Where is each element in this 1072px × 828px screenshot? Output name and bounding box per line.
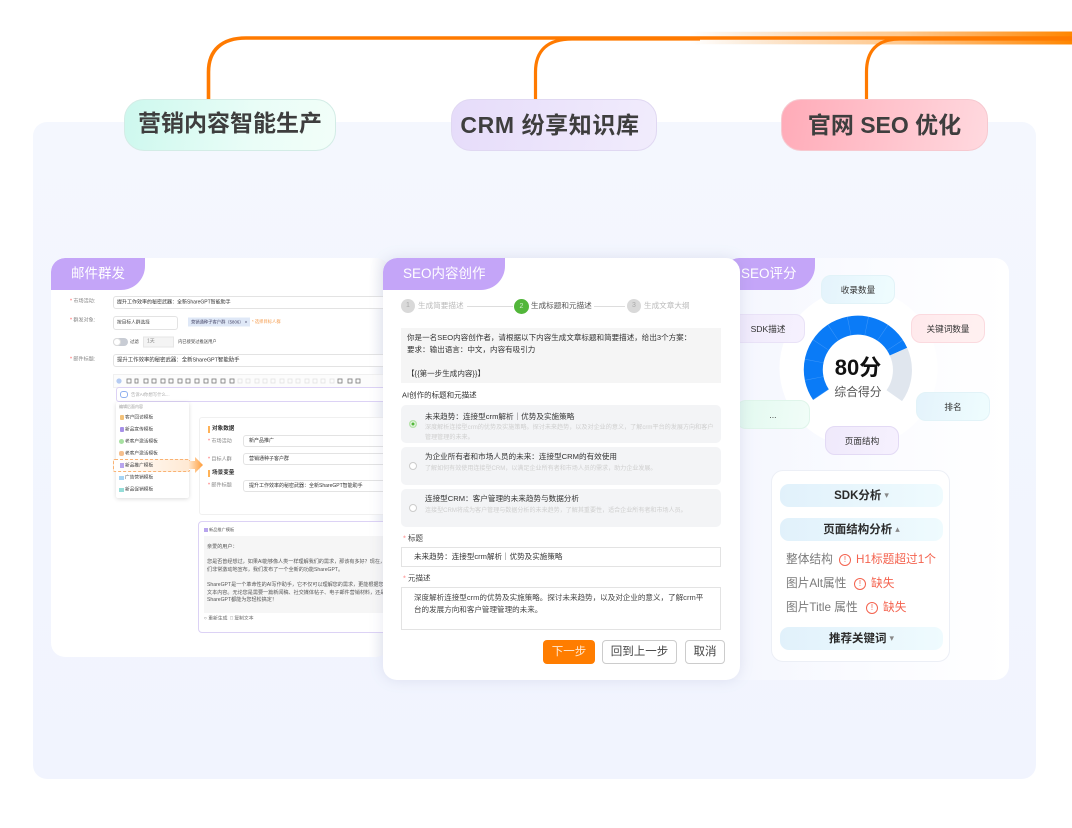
item text: 新品推广模板 xyxy=(125,463,153,468)
stepper xyxy=(401,299,690,314)
background panel xyxy=(33,122,1036,779)
step 1 circle xyxy=(401,299,415,313)
row: SDK分析: SDK分析 ▾ xyxy=(834,490,889,502)
item: 新品促销模板: 新品促销模板 xyxy=(125,487,153,492)
item: 客户回访模板: 客户回访模板 xyxy=(125,414,153,419)
label: 图片Alt属性: 图片Alt属性 xyxy=(786,577,846,590)
editor toolbar xyxy=(113,374,382,388)
radio xyxy=(409,462,417,470)
warning icon xyxy=(866,602,878,614)
option title: 为企业所有者和市场人员的未来：连接型CRM的有效使用 xyxy=(425,452,617,461)
button: 下一步: 下一步 xyxy=(552,646,586,658)
warning icon: ! xyxy=(844,555,846,564)
gauge value: 80分 xyxy=(835,355,881,380)
connector xyxy=(467,306,513,307)
row: SDK分析 xyxy=(780,484,943,507)
tag: 营销通种子客户群 xyxy=(188,318,250,326)
orange connector lines xyxy=(206,31,1072,99)
option 2 xyxy=(401,447,721,485)
email body: ShareGPT是一个革命性的AI写作助手，它不仅可以理解您的需求，更能根据您 xyxy=(207,582,384,588)
input: 标题: 未来趋势：连接型crm解析｜优势及实施策略 xyxy=(414,552,562,561)
button: 回到上一步: 回到上一步 xyxy=(611,646,668,658)
step 3 label: 生成文章大纲 xyxy=(644,301,690,310)
section label: AI创作的标题和元描述 xyxy=(402,390,477,399)
label: 标题: * 标题 xyxy=(403,533,423,542)
select: 1天 xyxy=(143,336,174,348)
button: 回到上一步 xyxy=(602,640,677,664)
label: 图片Title 属性: 图片Title 属性 xyxy=(786,601,858,614)
accent bar 2 xyxy=(208,470,210,477)
step 2 circle: 2 xyxy=(520,303,523,310)
input: 邮件标题 xyxy=(113,354,393,367)
input text: 市场活动: 提升工作效率的秘密武器：全新ShareGPT智能助手 xyxy=(117,299,231,305)
section title: 对象数据: 对象数据 xyxy=(212,426,234,432)
arrow: template to form xyxy=(189,457,203,473)
panel tab: 邮件群发: 邮件群发 xyxy=(71,266,125,281)
label: 邮件标题: * 邮件标题 xyxy=(208,482,232,488)
toggle knob xyxy=(113,338,121,346)
panel tab: SEO评分: SEO评分 xyxy=(741,266,797,281)
filter note: 内已接受过推送用户 xyxy=(178,339,217,344)
pill: more: ... xyxy=(769,410,777,420)
toggle label: 过滤 xyxy=(130,339,139,344)
step 1 circle: 1 xyxy=(406,302,410,309)
gauge caption: 综合得分 xyxy=(834,385,882,399)
hint: 选择目标人群: * 选择目标人群 xyxy=(252,319,281,324)
step 3 circle xyxy=(627,299,641,313)
panel tab: SEO评分 xyxy=(725,258,815,290)
pill: 收录数量 xyxy=(821,275,895,304)
accent bar xyxy=(208,426,210,433)
card: generated email xyxy=(198,521,393,633)
toggle switch xyxy=(113,338,128,346)
button: 取消 xyxy=(685,640,725,664)
option 3 xyxy=(401,489,721,527)
dropdown heading: 编辑后面内容 xyxy=(119,404,143,409)
prompt line 3: 【{{第一步生成内容}}】 xyxy=(407,369,485,378)
pill: 页面结构 xyxy=(825,426,899,455)
option description: 深度解析连接型crm的优势及实施策略。探讨未来趋势，以及对企业的意义，了解crm平台的发展方向和客户管理管理的未来。 xyxy=(425,424,713,441)
prompt line 1: 你是一名SEO内容创作者，请根据以下内容生成文章标题和简要描述，给出3个方案： xyxy=(407,333,691,342)
label: 整体结构: 整体结构 xyxy=(786,553,833,566)
label: 目标人群: * 目标人群 xyxy=(208,456,232,462)
textarea: 元描述 xyxy=(401,587,721,630)
email body: 们非常激动地宣布，我们发布了一个全新的功能ShareGPT。 xyxy=(207,567,343,573)
field: 目标人群: 营销通种子客户群 xyxy=(249,456,289,462)
item: 新品宣传模板: 新品宣传模板 xyxy=(125,426,153,431)
icon: 新品宣传模板 xyxy=(120,427,124,432)
warning icon: ! xyxy=(871,603,873,612)
pill: 排名: 排名 xyxy=(944,402,962,412)
input: 市场活动 xyxy=(113,296,393,309)
heading pill: 营销内容智能生产: 营销内容智能生产 xyxy=(138,110,322,136)
row: 推荐关键词 xyxy=(780,627,943,650)
pill: SDK描述: SDK描述 xyxy=(751,324,785,334)
form label: 群发对象: * 群发对象: xyxy=(70,317,95,323)
field: 市场活动: 新产品推广 xyxy=(249,438,274,444)
textarea: 元描述: 深度解析连接型crm的优势及实施策略。探讨未来趋势，以及对企业的意义，了解crm平台的发展方向和客户管理管理的未来。 xyxy=(414,593,703,614)
warning icon: ! xyxy=(859,579,861,588)
step 2 circle xyxy=(514,299,529,314)
select: 目标人群 xyxy=(113,316,178,330)
icon: 新品推广模板 xyxy=(120,463,124,468)
email body xyxy=(204,536,394,613)
card: analysis xyxy=(771,470,950,662)
radio xyxy=(409,504,417,512)
pill: more xyxy=(736,400,810,429)
panel: SEO评分 xyxy=(725,258,1009,680)
option 1 xyxy=(401,405,721,443)
panel: 邮件群发 xyxy=(51,258,390,657)
card icon xyxy=(204,528,208,532)
gauge chart xyxy=(780,316,912,401)
value: 缺失: 缺失 xyxy=(871,577,894,590)
prompt line 2: 要求：输出语言：中文，内容有吸引力 xyxy=(407,345,535,354)
heading pill: CRM 纷享知识库: CRM 纷享知识库 xyxy=(460,112,640,138)
pill: SDK描述 xyxy=(731,314,805,343)
pill: 排名 xyxy=(916,392,990,421)
pill: 页面结构: 页面结构 xyxy=(845,436,879,446)
row: 页面结构分析: 页面结构分析 ▴ xyxy=(823,524,900,536)
icon: 广告营销模板 xyxy=(119,476,124,480)
AI prompt icon xyxy=(120,391,128,398)
item: 老客户激活模板 2: 老客户激活模板 xyxy=(125,450,158,455)
input text: 邮件标题: 提升工作效率的秘密武器：全新ShareGPT智能助手 xyxy=(117,357,240,363)
item: 广告营销模板: 广告营销模板 xyxy=(125,475,153,480)
label: 元描述: * 元描述 xyxy=(403,573,431,582)
value: 缺失: 缺失 xyxy=(883,601,906,614)
option title: 连接型CRM：客户管理的未来趋势与数据分析 xyxy=(425,494,579,503)
email body: 文本内容。无论您是需要一篇新闻稿、社交媒体帖子、电子邮件营销材料，还是 xyxy=(207,590,385,596)
form label: 邮件标题: * 邮件标题: xyxy=(70,356,95,362)
panel: SEO内容创作 xyxy=(383,258,740,680)
step 2 label: 生成标题和元描述 xyxy=(531,301,592,310)
row: 页面结构分析 xyxy=(780,518,943,541)
actions: ○ 重新生成 □ 复制文本 xyxy=(204,617,254,622)
field: 邮件标题: 提升工作效率的秘密武器：全新ShareGPT智能助手 xyxy=(249,483,363,489)
section title: 场景变量: 场景变量 xyxy=(212,470,234,476)
AI prompt placeholder: 告诉AI你想写什么... xyxy=(131,392,170,397)
step 1 label: 生成简要描述 xyxy=(418,301,464,310)
warning icon xyxy=(839,554,851,566)
button: 下一步 xyxy=(543,640,595,664)
icon: 客户回访模板 xyxy=(120,415,124,420)
card title: 新品推广模板 xyxy=(209,527,234,532)
panel tab: 邮件群发 xyxy=(51,258,145,290)
panel tab: SEO内容创作: SEO内容创作 xyxy=(403,266,486,281)
row: 推荐关键词: 推荐关键词 ▾ xyxy=(829,633,894,645)
button: 取消: 取消 xyxy=(694,646,716,658)
option description: 了解如何有效使用连接型CRM，以满足企业所有者和市场人员的需求，助力企业发展。 xyxy=(425,465,656,471)
heading pill: 官网 SEO 优化 xyxy=(781,99,988,151)
icon: 新品促销模板 xyxy=(119,488,124,492)
selected item: 新品推广模板 xyxy=(113,459,190,472)
option description: 连接型CRM将成为客户管理与数据分析的未来趋势，了解其重要性，适合企业所有者和市场人员。 xyxy=(425,507,687,513)
icon: 老客户激活模板 xyxy=(119,439,124,444)
tag: 营销通种子客户群: 营销通种子客户群（5806） × xyxy=(191,320,247,324)
AI prompt input xyxy=(116,387,393,402)
form label: 市场活动: * 市场活动: xyxy=(70,298,95,304)
panel tab: SEO内容创作 xyxy=(383,258,505,290)
icon: 老客户激活模板 2 xyxy=(119,451,124,456)
email body: 您是否曾经想过，如果AI能够像人类一样理解我们的需求，那该有多好？现在， xyxy=(207,559,385,565)
warning icon xyxy=(854,578,866,590)
pill: 关键词数量: 关键词数量 xyxy=(926,324,969,334)
input: 标题 xyxy=(401,547,721,567)
pill: 收录数量: 收录数量 xyxy=(841,285,875,295)
heading pill: 营销内容智能生产 xyxy=(124,99,336,151)
field: 邮件标题 xyxy=(243,480,394,492)
connector xyxy=(594,306,625,307)
email body: ShareGPT都能为您轻松搞定！ xyxy=(207,597,277,603)
radio selected xyxy=(409,420,417,428)
item: 老客户激活模板: 老客户激活模板 xyxy=(125,438,158,443)
field: 市场活动 xyxy=(243,435,394,447)
select: 1天: 1天 xyxy=(147,338,155,344)
select text: 按目标人群选择 xyxy=(117,320,150,325)
card: variables form xyxy=(199,417,393,515)
label: 市场活动: * 市场活动 xyxy=(208,438,232,444)
option title: 未来趋势：连接型crm解析｜优势及实施策略 xyxy=(425,412,574,421)
pill: 关键词数量 xyxy=(911,314,985,343)
value: H1标题超过1个: H1标题超过1个 xyxy=(856,553,936,566)
email body: 亲爱的用户： xyxy=(207,544,238,550)
prompt box xyxy=(401,328,721,383)
step 3 circle: 3 xyxy=(632,302,636,309)
template dropdown xyxy=(116,402,189,498)
field: 目标人群 xyxy=(243,453,394,465)
heading pill: CRM 纷享知识库 xyxy=(451,99,657,151)
heading pill: 官网 SEO 优化: 官网 SEO 优化 xyxy=(808,112,961,138)
